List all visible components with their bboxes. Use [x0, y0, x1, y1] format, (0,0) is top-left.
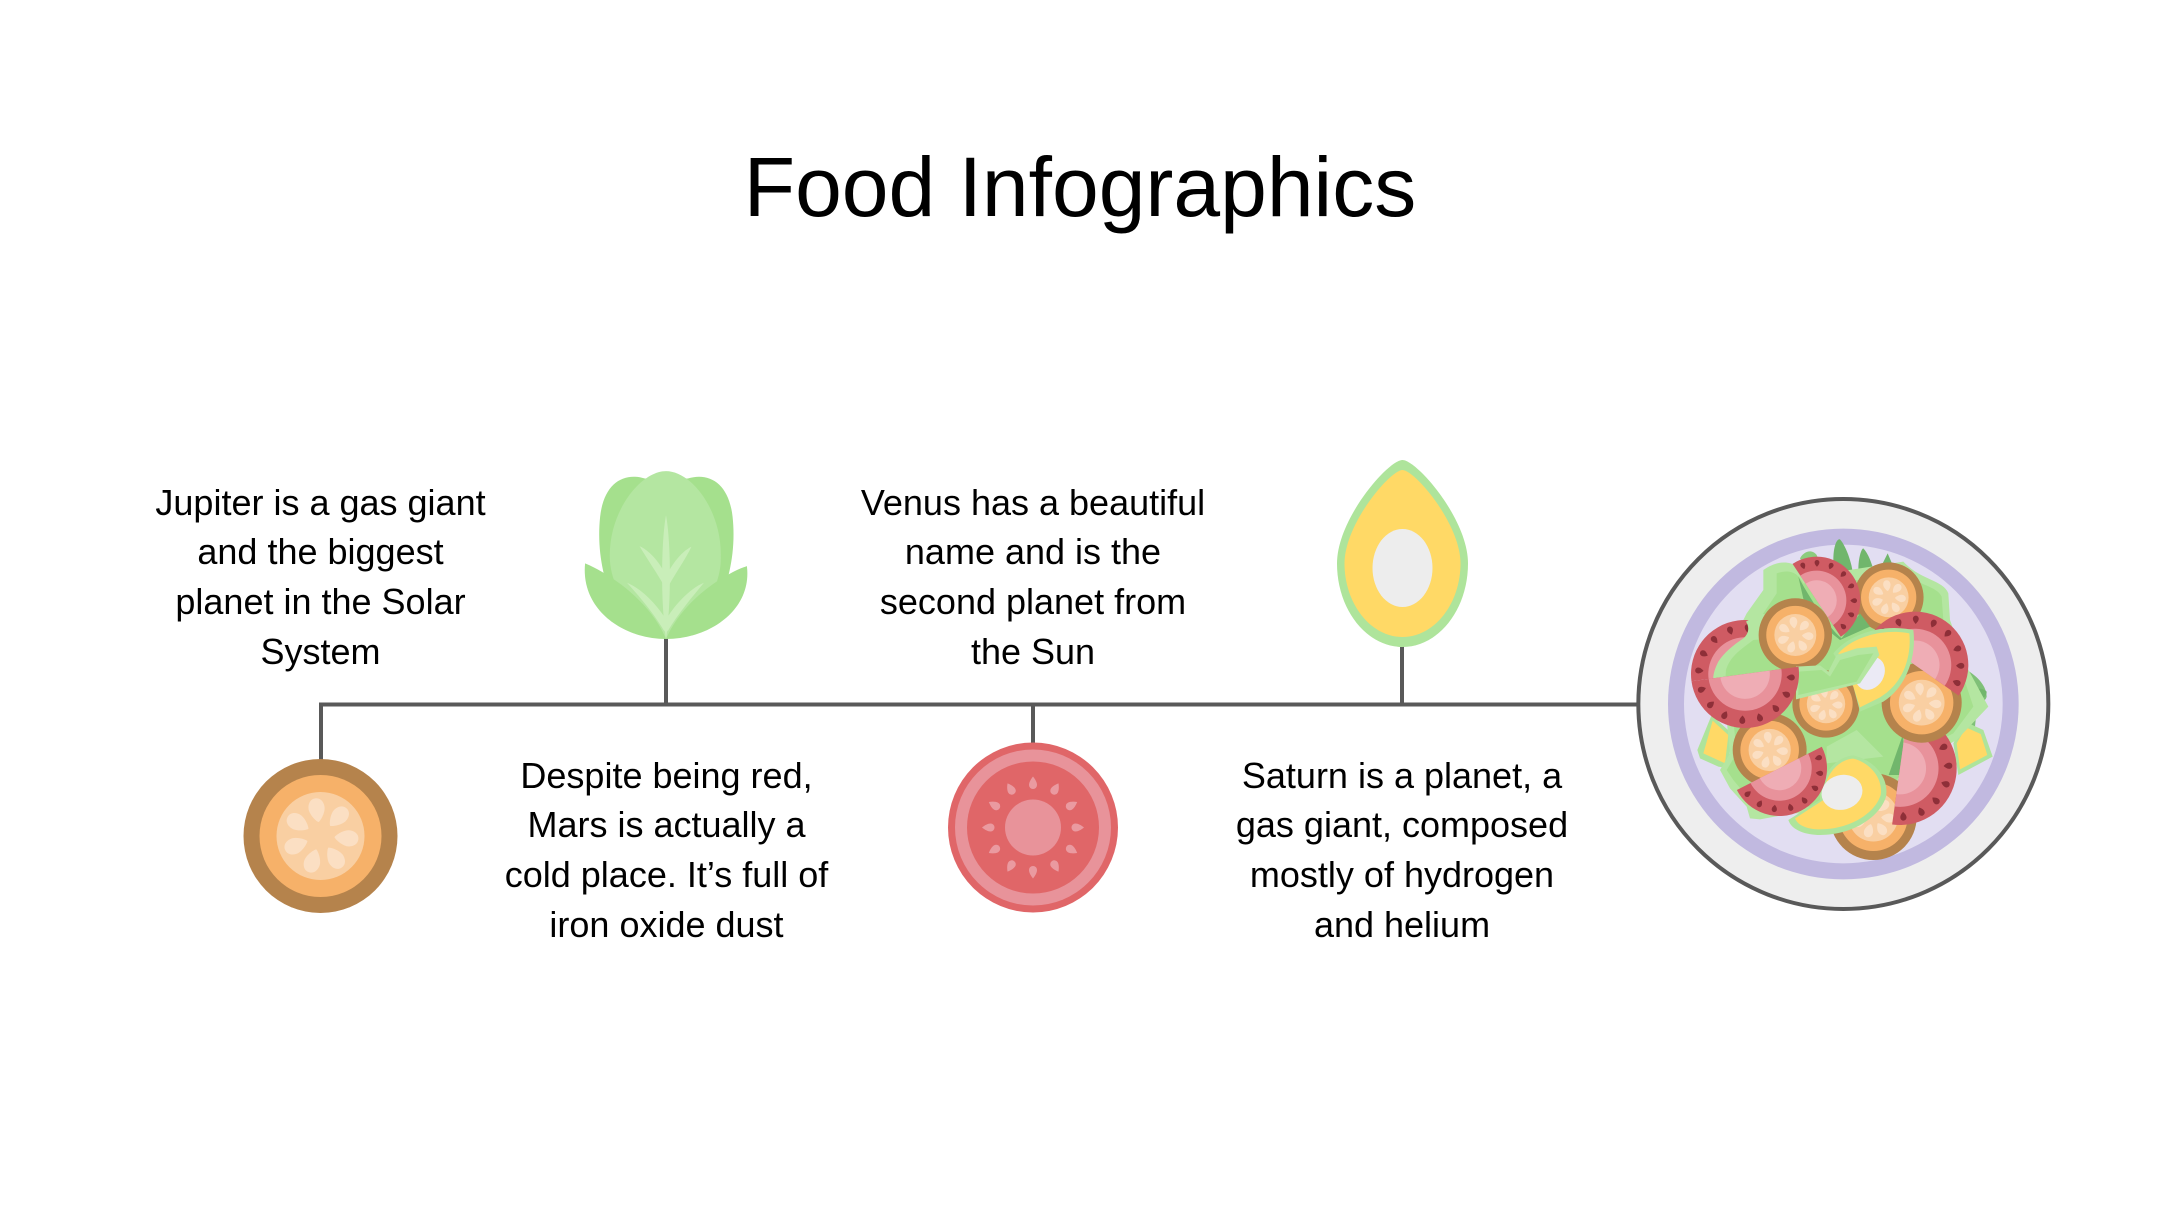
timeline connector lines	[321, 637, 1640, 761]
text: Jupiter	[155, 482, 486, 672]
salad: yellow side wedges	[1697, 715, 1993, 775]
text: Venus: Venus has a beautiful	[861, 482, 1205, 522]
text: Venus	[861, 482, 1205, 672]
text: Venus: second planet from	[880, 581, 1186, 622]
salad: tomato behind left	[1684, 613, 1799, 681]
salad: lower right tomato	[1889, 712, 1964, 832]
text: Venus: the Sun	[971, 631, 1095, 672]
text: Jupiter: planet in the Solar	[175, 581, 466, 622]
plate	[1638, 499, 2048, 909]
title: Food Infographics	[744, 140, 1416, 234]
salad: top orange	[1854, 562, 1924, 632]
salad: lower left tomato	[1737, 747, 1843, 832]
text: Saturn: gas giant, composed	[1236, 804, 1568, 845]
salad: small centre orange	[1792, 670, 1860, 738]
salad: lettuce	[1713, 562, 1988, 819]
salad: left tomato front	[1691, 667, 1806, 735]
salad: centre avocado	[1796, 628, 1914, 712]
text: Mars: Mars is actually a	[527, 804, 806, 845]
salad: lettuce over left tomato	[1713, 613, 1793, 681]
salad: right orange	[1882, 663, 1962, 743]
text: Saturn: and helium	[1314, 904, 1490, 945]
text: Saturn: Saturn is a planet, a	[1242, 754, 1562, 796]
text: Mars: iron oxide dust	[549, 904, 784, 945]
salad: lower left orange	[1733, 713, 1807, 787]
text: Venus: name and is the	[905, 531, 1161, 572]
text: Jupiter: and the biggest	[197, 531, 444, 572]
salad plate	[1638, 499, 2048, 909]
icon: tomato slice	[948, 742, 1118, 912]
text: Mars	[505, 754, 828, 945]
salad: right tomato	[1871, 591, 1989, 696]
text: Mars: Despite being red,	[520, 754, 813, 796]
icon: avocado half	[1337, 460, 1468, 647]
text: Jupiter: System	[260, 631, 381, 672]
text: Jupiter: Jupiter is a gas giant	[155, 482, 486, 522]
salad: left orange	[1759, 598, 1832, 672]
salad: dark greens	[1800, 539, 1987, 743]
salad: dark green sliver and top tomato	[1793, 540, 1877, 640]
text: Saturn: mostly of hydrogen	[1250, 854, 1554, 895]
text: Saturn	[1236, 754, 1568, 945]
salad: bottom orange	[1830, 773, 1917, 860]
icon: lettuce leaf	[585, 471, 747, 639]
salad: lower avocado	[1788, 755, 1886, 835]
icon: orange slice	[244, 759, 398, 913]
text: Mars: cold place. It’s full of	[505, 854, 828, 895]
